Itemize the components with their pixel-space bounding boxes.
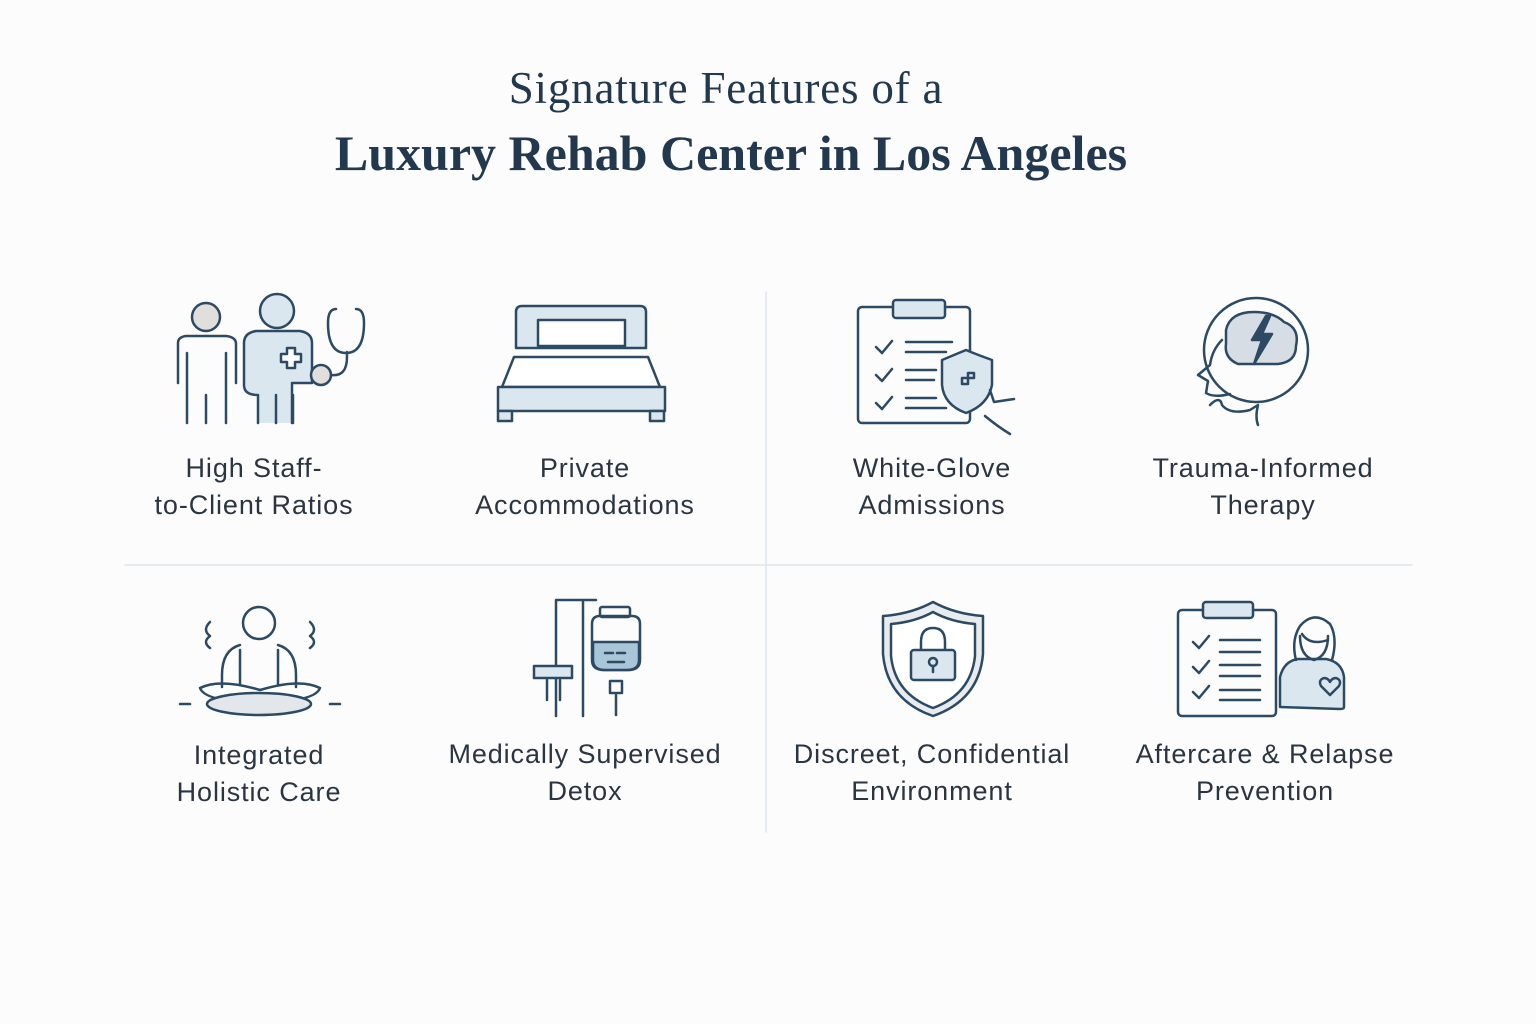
- label: trauma: [1152, 453, 1374, 520]
- label: aftercare: Prevention: [1196, 776, 1334, 806]
- label: holistic: [177, 740, 341, 807]
- label: detox: Medically Supervised: [448, 739, 722, 769]
- icon: shield: [883, 602, 983, 716]
- label: trauma: Therapy: [1210, 490, 1316, 520]
- label: admissions: White-Glove: [853, 453, 1011, 483]
- label: discreet: Discreet, Confidential: [794, 739, 1070, 769]
- label: discreet: [794, 739, 1070, 806]
- title: Luxury Rehab Center in Los Angeles: [335, 125, 1127, 181]
- label: staff: High Staff-: [186, 453, 322, 483]
- label: aftercare: Aftercare & Relapse: [1136, 739, 1394, 769]
- icon: staff: [178, 294, 364, 423]
- label: detox: Detox: [547, 776, 623, 806]
- icon: head: [1198, 298, 1308, 425]
- label: staff: [154, 453, 353, 520]
- icon: meditation: [180, 607, 340, 715]
- label: trauma: Trauma-Informed: [1152, 453, 1374, 483]
- label: private: [475, 453, 695, 520]
- label: admissions: [852, 453, 1011, 520]
- label: staff: to-Client Ratios: [154, 490, 353, 520]
- icon: aftercare: [1178, 602, 1344, 716]
- title: [335, 63, 1127, 181]
- icon: clipboard: [858, 300, 1014, 434]
- label: private: Accommodations: [475, 490, 695, 520]
- label: admissions: Admissions: [858, 490, 1006, 520]
- label: holistic: Holistic Care: [177, 777, 341, 807]
- icon: bed: [498, 306, 665, 421]
- icon: IV: [534, 600, 640, 716]
- label: private: Private: [540, 453, 630, 483]
- label: aftercare: [1136, 739, 1394, 806]
- label: holistic: Integrated: [194, 740, 324, 770]
- title: Signature Features of a: [509, 63, 943, 113]
- label: discreet: Environment: [851, 776, 1013, 806]
- label: detox: [448, 739, 722, 806]
